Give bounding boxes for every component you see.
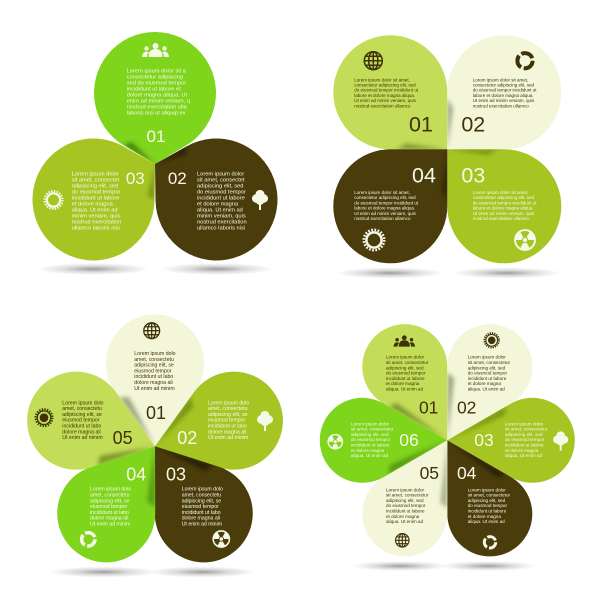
text block 03: adipiscing elit, se	[182, 498, 221, 504]
icon: tree	[553, 431, 568, 450]
text block 03: Lorem ipsum dolor sit amet,	[473, 190, 528, 195]
ground shadow right	[453, 268, 561, 278]
text block 04: aliqua. Ut enim ad	[468, 519, 505, 524]
petal 01 shape	[362, 324, 448, 440]
text block 02: nostrud exercitation	[197, 220, 247, 226]
icon: cycle	[484, 537, 496, 548]
petal 02	[447, 324, 532, 440]
number 06: 06	[399, 430, 419, 450]
text block 01: adipiscing elit, se	[134, 363, 174, 369]
icon: sun	[36, 409, 52, 426]
text block 05: adipiscing elit, sed	[386, 498, 424, 503]
text block 03: aliqua. Ut enim ad	[72, 208, 118, 214]
text block 05: incididunt ut labore	[386, 508, 425, 514]
petal 01	[94, 32, 216, 164]
text block 03: incididunt ut labo	[182, 510, 221, 516]
number 04: 04	[126, 465, 146, 485]
text block 01: consectetur adipiscing	[127, 74, 183, 80]
number 02: 02	[457, 398, 476, 418]
number 01: 01	[419, 398, 438, 418]
text block 04: adipiscing elit, se	[90, 498, 130, 504]
number 02: 02	[461, 113, 485, 137]
petal 03 shape	[447, 149, 562, 264]
petal 06	[320, 398, 447, 483]
icon: tree	[257, 411, 273, 431]
icon: radiation	[212, 531, 230, 547]
text block 03: amet, consectetu	[182, 492, 221, 498]
text block 04: adipiscing elit, sed	[468, 498, 506, 503]
text block 02: et dolore magna	[197, 202, 239, 208]
number 02: 02	[168, 169, 187, 188]
text block 03: nostrud exercitation ullamco	[473, 216, 529, 221]
number 03: 03	[126, 169, 145, 188]
icon: radiation	[327, 435, 343, 449]
petal 03 shape	[155, 446, 253, 562]
number 03: 03	[166, 465, 186, 485]
petal 02	[155, 372, 283, 470]
text block 01: dolore magna ali	[134, 380, 173, 386]
icon: radiation	[514, 230, 536, 250]
ground shadow right	[148, 566, 256, 578]
petal 02 shape	[447, 324, 532, 440]
text block 01: Lorem ipsum dolor sit amet,	[354, 77, 410, 82]
ground shadow left	[352, 561, 448, 571]
text block 03: minim veniam, quis	[72, 214, 121, 220]
number 04: 04	[457, 463, 477, 483]
text block 03: Lorem ipsum dolo	[182, 487, 223, 493]
text block 01: do eiusmod tempor	[386, 371, 426, 376]
ground shadow right	[161, 263, 273, 275]
text block 04: et dolore magna	[468, 514, 501, 519]
text block 02: ullamco laboris nisi	[197, 226, 245, 232]
petal 03	[32, 138, 155, 260]
petal 02 shape	[447, 35, 562, 150]
text block 01: aliqua. Ut enim ad	[386, 386, 423, 392]
panel: four-part diagram	[333, 35, 562, 278]
icon: globe	[364, 52, 382, 70]
text block 04: labore et dolore magna aliqua.	[354, 206, 415, 211]
text block 04: nostrud exercitation ullamco	[354, 216, 411, 221]
text block 04: eiusmod tempor	[90, 504, 127, 510]
text block 02: incididunt ut labo	[208, 424, 247, 430]
text block 03: nostrud exercitation	[72, 220, 121, 226]
ground shadow left	[49, 566, 157, 578]
text block 01: Ut enim ad minim veniam, quis	[354, 98, 417, 103]
text block 02: amet, consectetu	[208, 406, 248, 412]
number 01: 01	[146, 403, 166, 423]
text block 05: sit amet, consectetur	[386, 493, 429, 498]
text block 01: labore et dolore magna aliqua.	[354, 93, 415, 98]
text block 02: incididunt ut labore	[468, 376, 507, 381]
text block 04: Lorem ipsum dolor sit amet,	[354, 190, 410, 195]
text block 02: adipiscing elit, sed	[197, 184, 243, 190]
text block 01: Ut enim ad minim	[134, 386, 175, 392]
number 04: 04	[412, 164, 436, 188]
text block 01: incididunt ut labore et	[127, 86, 181, 92]
text block 02: Lorem ipsum dolor sit amet,	[473, 77, 528, 82]
text block 02: Lorem ipsum dolo	[208, 400, 249, 406]
text block 06: do eiusmod tempor	[351, 437, 391, 442]
text block 02: sit amet, consectetur	[468, 360, 511, 365]
number 02: 02	[177, 428, 197, 448]
text block 01: Lorem ipsum dolor	[386, 355, 425, 360]
text block 01: incididunt ut labore	[386, 376, 425, 381]
text block 06: et dolore magna	[351, 448, 385, 453]
text block 05: eiusmod tempor	[62, 418, 100, 424]
petal 03	[447, 149, 562, 264]
text block 03: do eiusmod tempor	[72, 190, 120, 196]
petal 04	[333, 149, 448, 264]
text block 05: et dolore magna	[386, 514, 420, 519]
text block 03: Ut enim ad minim	[182, 522, 222, 528]
icon: gear	[364, 230, 384, 250]
text block 05: incididunt ut labo	[62, 424, 101, 430]
text block 04: do eiusmod tempor incididunt ut	[354, 200, 419, 205]
icon: people	[394, 335, 415, 347]
text block 01: adipiscing elit, sed	[386, 365, 424, 370]
text block 01: incididunt ut labo	[134, 374, 173, 380]
text block 02: et dolore magna	[468, 381, 501, 386]
icon: globe	[144, 323, 160, 339]
text block 01: enim ad minim veniam, q	[127, 99, 190, 105]
text block 04: amet, consectetu	[90, 492, 130, 498]
number 01: 01	[409, 113, 433, 137]
petal 01 shape	[333, 35, 448, 150]
text block 06: sit amet, consectetur	[351, 427, 394, 432]
text block 05: do eiusmod tempor	[386, 503, 426, 508]
icon: people	[142, 43, 169, 57]
petal 02 shape	[155, 372, 283, 470]
text block 01: do eiusmod tempor incididunt ut	[354, 88, 419, 93]
panel: three-part diagram	[32, 32, 278, 274]
text block 01: sed do eiusmod tempor	[127, 80, 186, 86]
petal 04 shape	[333, 149, 448, 264]
text block 03: labore et dolore magna aliqua.	[473, 206, 533, 211]
petal 02 shape	[155, 138, 278, 260]
text block 03: incididunt ut labore	[505, 442, 544, 448]
text block 01: dolore magna aliqua. Ut	[127, 92, 188, 98]
text block 02: dolore magna ali	[208, 429, 246, 435]
text block 04: Lorem ipsum dolor	[468, 487, 506, 492]
icon: cycle	[82, 533, 95, 546]
text block 04: incididunt ut labore	[468, 508, 507, 514]
panel: six-part diagram	[320, 309, 575, 572]
text block 02: do eiusmod tempor	[197, 190, 246, 196]
text block 04: dolore magna ali	[90, 516, 128, 522]
ground shadow right	[440, 561, 536, 571]
text block 03: adipiscing elit, sed	[72, 184, 118, 190]
text block 01: consectetur adipiscing elit, sed	[354, 82, 416, 88]
text block 03: Lorem ipsum dolor	[72, 172, 119, 178]
text block 04: Ut enim ad minim veniam, quis	[354, 211, 417, 216]
text block 02: eiusmod tempor	[208, 418, 245, 424]
panel: five-part diagram	[27, 314, 283, 577]
text block 02: do eiusmod tempor	[468, 371, 507, 376]
text block 02: aliqua. Ut enim ad	[197, 208, 243, 214]
text block 03: do eiusmod tempor incididunt ut	[473, 200, 537, 205]
text block 06: aliqua. Ut enim ad	[351, 453, 388, 458]
number 03: 03	[474, 430, 494, 450]
text block 01: et dolore magna	[386, 381, 420, 386]
text block 03: incididunt ut labore	[72, 196, 119, 202]
text block 04: Lorem ipsum dolo	[90, 487, 131, 493]
text block 04: do eiusmod tempor	[468, 503, 507, 508]
petal 04 shape	[447, 440, 532, 556]
text block 01: laboris nisi ut aliquip ex	[127, 111, 186, 117]
text block 02: labore et dolore magna aliqua.	[473, 93, 533, 98]
text block 01: sit amet, consectetur	[386, 360, 429, 365]
icon: sun	[484, 333, 499, 348]
ground shadow left	[37, 263, 149, 275]
text block 02: Ut enim ad minim veniam, quis	[473, 98, 535, 103]
petal 02	[155, 138, 278, 260]
text block 05: aliqua. Ut enim ad	[386, 519, 423, 524]
petal 02	[447, 35, 562, 150]
text block 03: aliqua. Ut enim ad	[505, 453, 542, 458]
text block 01: Lorem ipsum dolor sit a	[127, 68, 187, 74]
ground shadow left	[336, 268, 444, 278]
icon: cycle	[517, 53, 533, 68]
text block 03: et dolore magna	[505, 448, 539, 453]
text block 05: amet, consectetu	[62, 406, 102, 412]
text block 06: adipiscing elit, sed	[351, 432, 389, 437]
text block 03: eiusmod tempor	[182, 504, 219, 510]
text block 05: dolore magna ali	[62, 429, 101, 435]
number 05: 05	[420, 463, 439, 483]
text block 02: incididunt ut labore	[197, 196, 245, 202]
text block 01: eiusmod tempor	[134, 368, 172, 374]
petal 03	[155, 446, 253, 562]
text block 03: Lorem ipsum dolor	[505, 421, 544, 426]
text block 02: sit amet, consectet	[197, 178, 245, 184]
text block 03: et dolore magna	[72, 202, 114, 208]
text block 02: aliqua. Ut enim ad	[468, 386, 505, 392]
number 03: 03	[461, 164, 485, 188]
petal 05	[362, 440, 448, 556]
text block 03: adipiscing elit, sed	[505, 432, 543, 437]
text block 01: nostrud exercitation ullamco	[354, 103, 411, 108]
petal 05 shape	[27, 372, 155, 470]
text block 04: consectetur adipiscing elit, sed	[354, 195, 416, 200]
text block 03: sit amet, consectetur	[505, 427, 548, 432]
petal 05	[27, 372, 155, 470]
text block 03: dolore magna ali	[182, 516, 220, 522]
petal 01	[333, 35, 448, 150]
petal 01	[362, 324, 448, 440]
text block 01: nostrud exercitation ulla	[127, 105, 188, 111]
text block 03: ullamco laboris nisi	[72, 226, 120, 232]
petal 04	[447, 440, 532, 556]
text block 05: Ut enim ad minim	[62, 435, 103, 441]
petal 01 shape	[94, 32, 216, 164]
text block 01: amet, consectetu	[134, 357, 174, 363]
text block 05: Lorem ipsum dolo	[62, 400, 104, 406]
icon: tree	[252, 190, 268, 210]
text block 04: incididunt ut labo	[90, 510, 129, 516]
petal 01 shape	[106, 314, 204, 446]
icon: globe	[396, 534, 409, 547]
petal 03 shape	[32, 138, 155, 260]
petal 03	[447, 398, 575, 483]
text block 02: adipiscing elit, sed	[468, 365, 506, 370]
text block 03: do eiusmod tempor	[505, 437, 545, 442]
number 05: 05	[113, 428, 133, 448]
text block 02: consectetur adipiscing elit, sed	[473, 82, 534, 88]
petal 03 shape	[447, 398, 575, 483]
petal 05 shape	[362, 440, 448, 556]
text block 02: nostrud exercitation ullamco	[473, 103, 529, 108]
text block 01: Lorem ipsum dolo	[134, 351, 176, 357]
text block 03: sit amet, consectet	[72, 178, 120, 184]
text block 05: Lorem ipsum dolor	[386, 487, 425, 492]
text block 03: consectetur adipiscing elit, sed	[473, 195, 534, 200]
text block 02: Lorem ipsum dolor	[468, 355, 506, 360]
text block 06: incididunt ut labore	[351, 442, 390, 448]
text block 04: sit amet, consectetur	[468, 493, 511, 498]
text block 02: do eiusmod tempor incididunt ut	[473, 88, 537, 93]
text block 04: Ut enim ad minim	[90, 522, 130, 528]
text block 02: minim veniam, quis	[197, 214, 246, 220]
text block 02: Lorem ipsum dolor	[197, 172, 244, 178]
petal 01	[106, 314, 204, 446]
number 01: 01	[147, 127, 165, 146]
text block 02: adipiscing elit, se	[208, 412, 248, 418]
icon: sun	[45, 191, 62, 209]
text block 02: Ut enim ad minim	[208, 435, 248, 441]
petal 04 shape	[57, 446, 156, 562]
text block 03: Ut enim ad minim veniam, quis	[473, 211, 535, 216]
text block 05: adipiscing elit, se	[62, 412, 102, 418]
petal 06 shape	[320, 398, 447, 483]
petal 04	[57, 446, 156, 562]
text block 06: Lorem ipsum dolor	[351, 421, 390, 426]
